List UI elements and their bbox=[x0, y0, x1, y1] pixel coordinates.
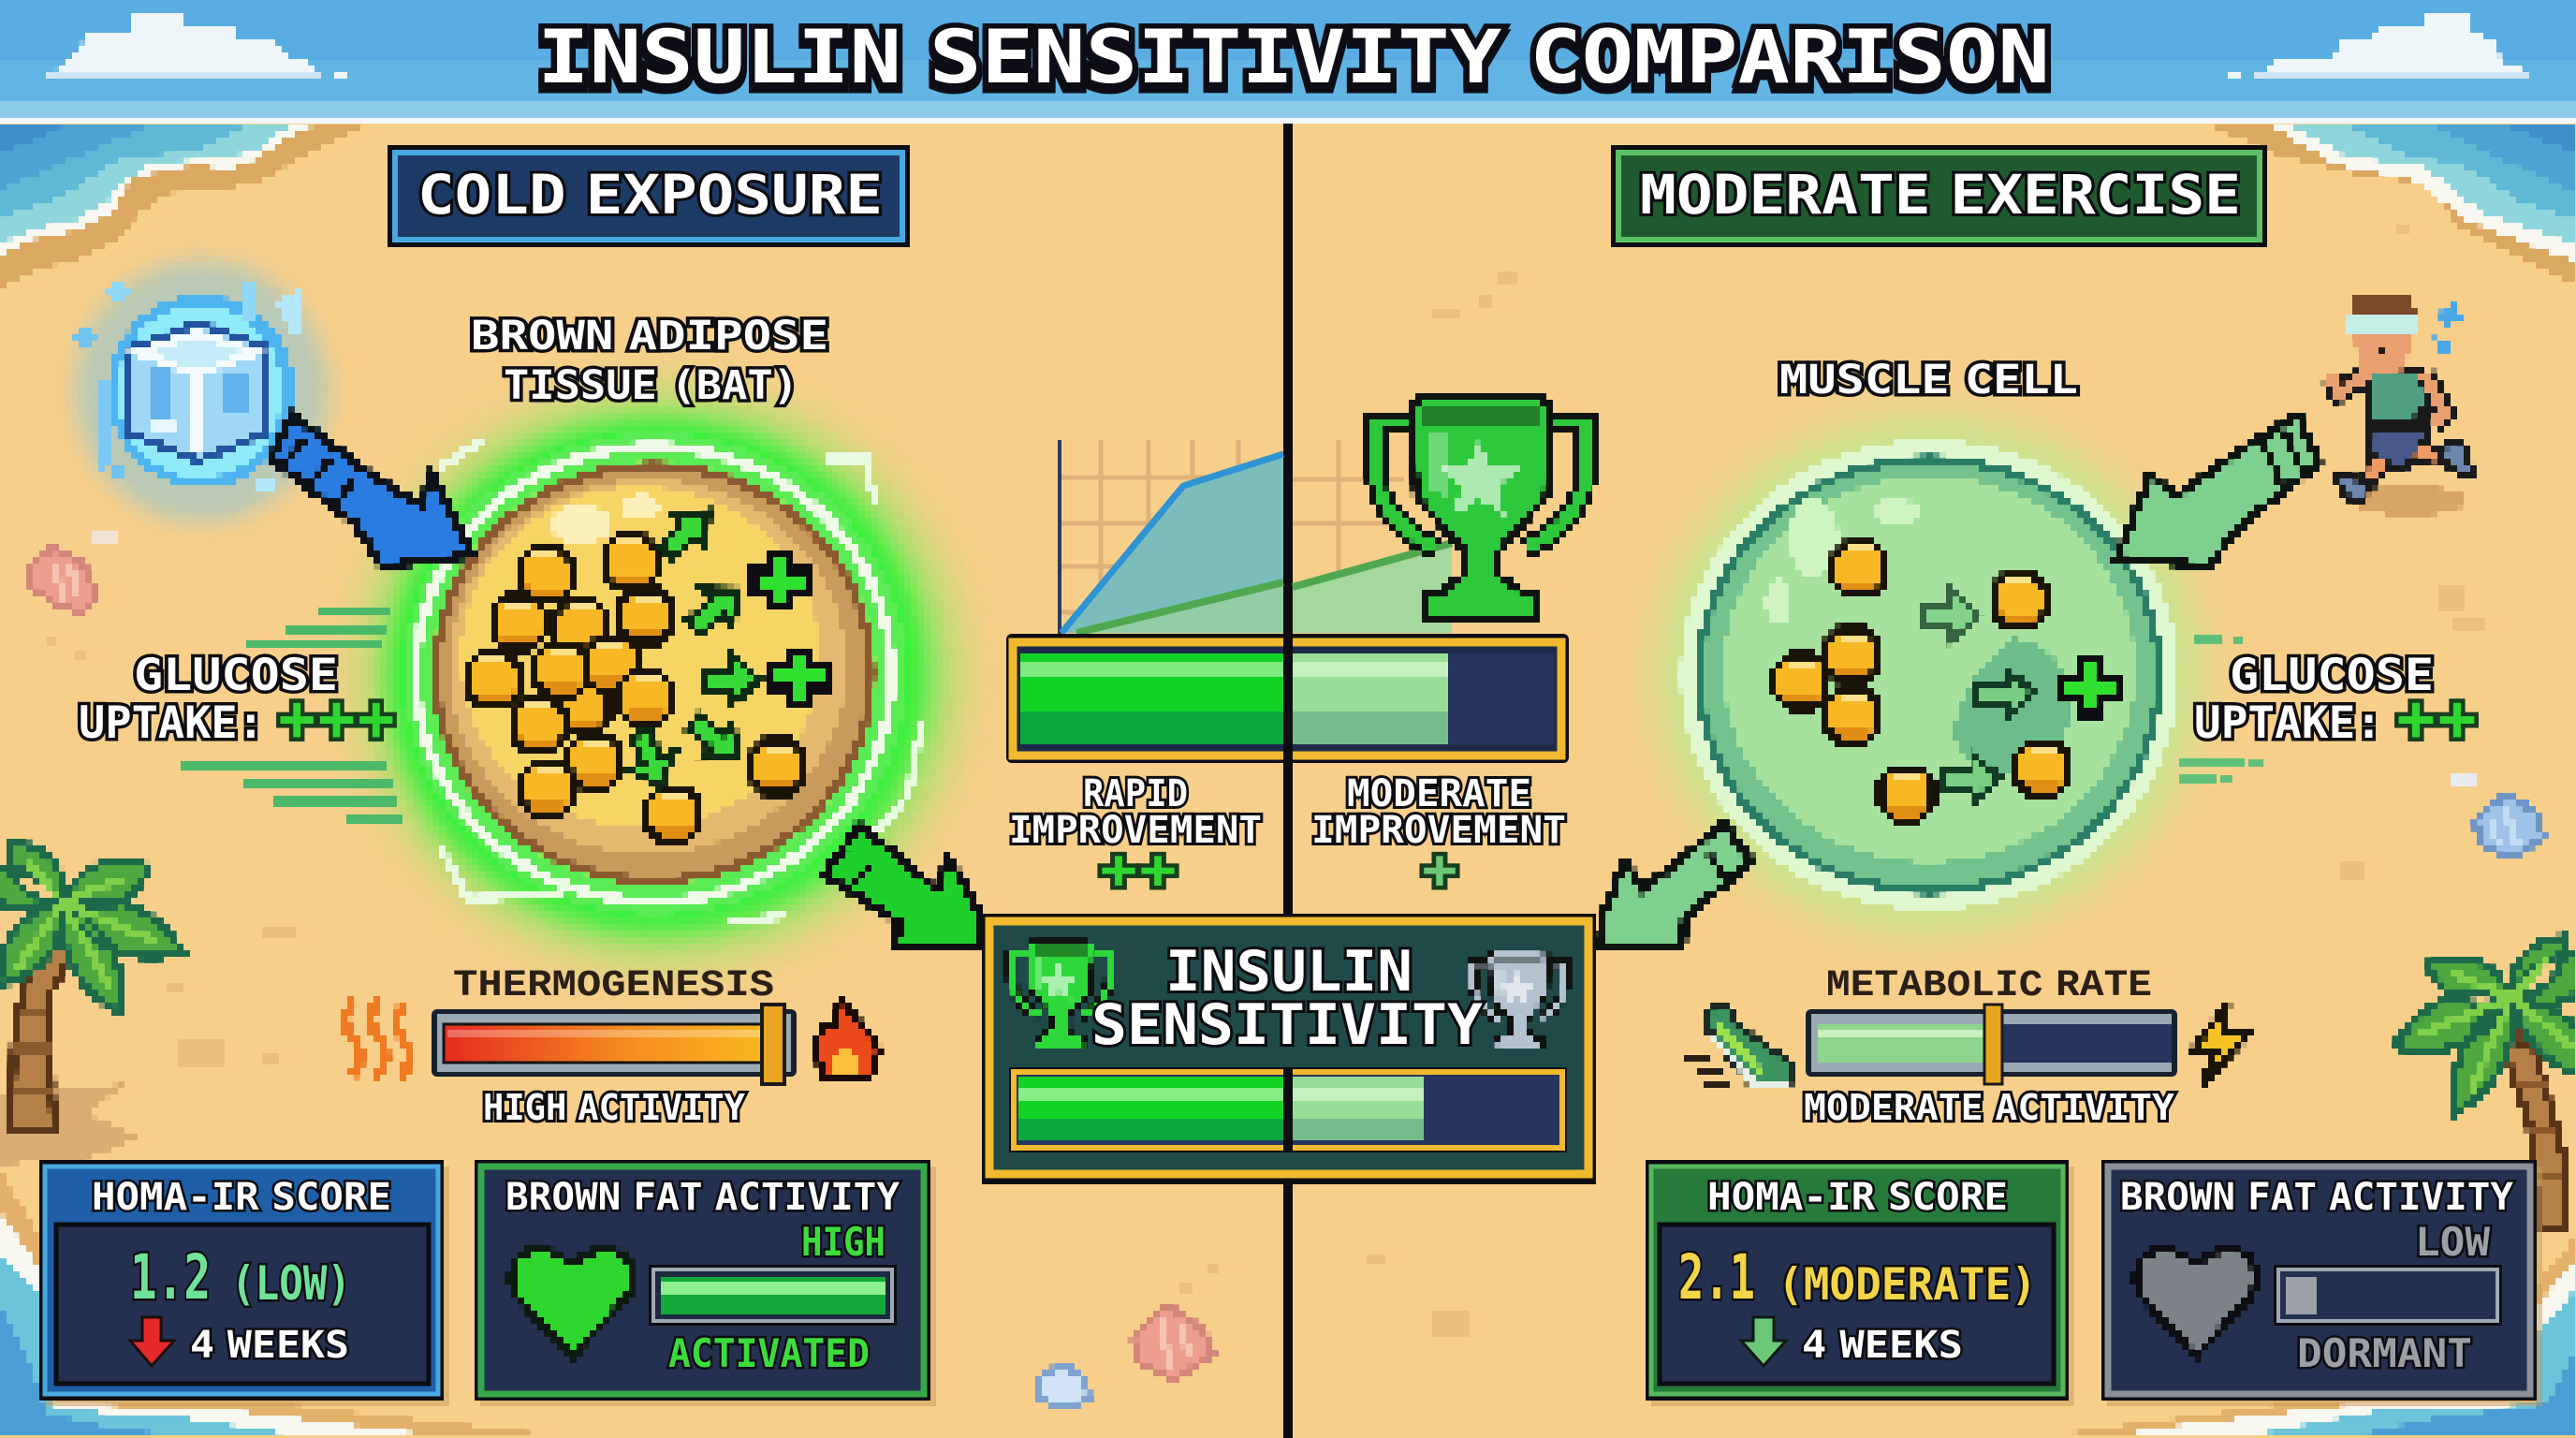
icon: lightning bolt bbox=[2190, 1004, 2249, 1084]
ocean: bottom-left corner bbox=[0, 1168, 580, 1438]
gauge bbox=[649, 1265, 897, 1326]
label: moderate improvement bbox=[1311, 772, 1566, 908]
label: rapid improvement: RAPID bbox=[1083, 772, 1188, 815]
label: glucose uptake exercise: GLUCOSE bbox=[2230, 650, 2434, 701]
card: HOMA-IR cold: 4 WEEKS bbox=[190, 1324, 349, 1367]
icon: grey heart bbox=[2136, 1250, 2256, 1357]
label: glucose uptake exercise bbox=[2194, 650, 2478, 763]
icon: green down arrow bbox=[1741, 1317, 1786, 1366]
ocean: top-left corner bbox=[0, 123, 373, 288]
thermogenesis gauge bbox=[432, 1005, 797, 1084]
heading: insulin sensitivity bbox=[1091, 939, 1483, 1058]
panel heading: cold exposure bbox=[388, 145, 910, 247]
card: HOMA-IR exercise: 4 WEEKS bbox=[1802, 1324, 1963, 1367]
arrow: brown fat to insulin panel bbox=[826, 825, 982, 948]
icon: big green trophy bbox=[1376, 395, 1587, 617]
label: glucose uptake cold: UPTAKE: bbox=[79, 697, 264, 749]
cloud: left bbox=[43, 10, 347, 81]
clouds bbox=[43, 10, 2532, 81]
icon: pink shell left bbox=[28, 529, 116, 612]
label: brown adipose tissue bbox=[471, 313, 828, 409]
panel: insulin sensitivity result bbox=[982, 914, 1596, 1184]
heading: insulin sensitivity: INSULIN bbox=[1165, 939, 1412, 1005]
label: brown adipose tissue: TISSUE (BAT) bbox=[504, 362, 798, 409]
card: HOMA-IR exercise: 2.1 bbox=[1678, 1241, 1755, 1313]
panel heading: moderate exercise bbox=[1611, 145, 2267, 247]
progress bar: overall bbox=[1009, 1067, 1567, 1152]
title: INSULIN SENSITIVITY COMPARISON bbox=[537, 16, 2050, 100]
uptake arrows and plus bbox=[1922, 591, 2119, 802]
card: brown fat activity cold: BROWN FAT ACTIVITY bbox=[505, 1176, 900, 1219]
label: glucose uptake cold bbox=[79, 650, 396, 763]
card: brown fat activity exercise bbox=[2101, 1160, 2542, 1406]
glucose molecules bbox=[467, 536, 804, 841]
line chart bbox=[1058, 440, 1452, 634]
brown adipose cell bbox=[362, 391, 958, 961]
label: metabolic rate: METABOLIC RATE bbox=[1826, 965, 2152, 1007]
icon: running shoe bbox=[1687, 1004, 1791, 1084]
heading: insulin sensitivity: SENSITIVITY bbox=[1091, 992, 1483, 1058]
icon: green heart bbox=[511, 1250, 633, 1357]
speed lines right bbox=[2179, 635, 2263, 784]
icon: ice cube bbox=[73, 260, 328, 522]
sand specks bbox=[47, 225, 2485, 1337]
panel heading: cold exposure: COLD EXPOSURE bbox=[417, 163, 883, 227]
arrow: cold to brown fat bbox=[271, 415, 473, 566]
cloud: right bbox=[2229, 10, 2532, 81]
label: moderate activity: MODERATE ACTIVITY bbox=[1804, 1087, 2174, 1128]
card: HOMA-IR exercise: (MODERATE) bbox=[1778, 1259, 2037, 1311]
label: muscle cell: MUSCLE CELL bbox=[1779, 357, 2078, 404]
card: HOMA-IR cold: (LOW) bbox=[231, 1256, 351, 1311]
glucose molecules bbox=[1775, 543, 2069, 820]
card: HOMA-IR exercise: HOMA-IR SCORE bbox=[1707, 1176, 2008, 1219]
card: HOMA-IR cold bbox=[39, 1160, 449, 1406]
label: glucose uptake exercise: ++ bbox=[2395, 686, 2478, 763]
label: rapid improvement bbox=[1009, 772, 1262, 908]
icon: red down arrow bbox=[130, 1317, 174, 1366]
card: brown fat activity cold: HIGH bbox=[801, 1219, 886, 1265]
metabolic rate gauge bbox=[1806, 1005, 2177, 1084]
label: glucose uptake cold: GLUCOSE bbox=[134, 650, 338, 701]
label: glucose uptake cold: +++ bbox=[277, 686, 396, 763]
label: moderate improvement: IMPROVEMENT bbox=[1311, 809, 1566, 852]
card: brown fat activity exercise: BROWN FAT ACTIVITY bbox=[2120, 1176, 2513, 1219]
card: brown fat activity cold bbox=[475, 1160, 936, 1406]
progress bar: improvement comparison bbox=[1006, 634, 1569, 763]
icon: heat waves bbox=[345, 999, 409, 1078]
arrow: exercise to insulin panel bbox=[1599, 822, 1752, 948]
card: HOMA-IR exercise bbox=[1646, 1160, 2074, 1406]
label: moderate improvement: + bbox=[1421, 842, 1458, 908]
label: moderate improvement: MODERATE bbox=[1347, 772, 1531, 815]
icon: runner bbox=[2331, 292, 2473, 516]
ocean: bottom-right corner bbox=[2031, 1236, 2576, 1438]
muscle cell bbox=[1658, 418, 2201, 932]
card: brown fat activity cold: ACTIVATED bbox=[668, 1330, 870, 1376]
label: high activity: HIGH ACTIVITY bbox=[483, 1087, 745, 1128]
card: HOMA-IR cold: 1.2 bbox=[130, 1241, 211, 1313]
arrow: runner to muscle cell bbox=[2117, 415, 2319, 566]
label: thermogenesis: THERMOGENESIS bbox=[453, 965, 774, 1007]
label: glucose uptake exercise: UPTAKE: bbox=[2194, 697, 2382, 749]
center divider bbox=[1283, 123, 1293, 1438]
label: rapid improvement: ++ bbox=[1099, 842, 1178, 908]
icon: pink shell bottom bbox=[1134, 1304, 1214, 1380]
card: HOMA-IR cold: HOMA-IR SCORE bbox=[92, 1176, 391, 1219]
label: brown adipose tissue: BROWN ADIPOSE bbox=[471, 313, 828, 360]
palm tree: left bbox=[0, 844, 183, 1165]
panel heading: moderate exercise: MODERATE EXERCISE bbox=[1640, 163, 2241, 227]
card: brown fat activity exercise: DORMANT bbox=[2297, 1330, 2472, 1376]
ocean: top-right corner bbox=[2203, 123, 2576, 285]
label: rapid improvement: IMPROVEMENT bbox=[1009, 809, 1262, 852]
icon: blue shell right bbox=[2452, 772, 2543, 857]
speed lines left bbox=[181, 608, 402, 824]
icon: blue shell bottom bbox=[1037, 1363, 1089, 1407]
card: brown fat activity exercise: LOW bbox=[2415, 1219, 2491, 1265]
uptake arrows and pluses bbox=[618, 494, 827, 796]
header band bbox=[0, 0, 2576, 124]
icons: small trophies bbox=[1011, 940, 1565, 1049]
palm tree: right bbox=[2394, 937, 2576, 1226]
gauge bbox=[2274, 1265, 2502, 1326]
icon: flame bbox=[813, 999, 879, 1077]
